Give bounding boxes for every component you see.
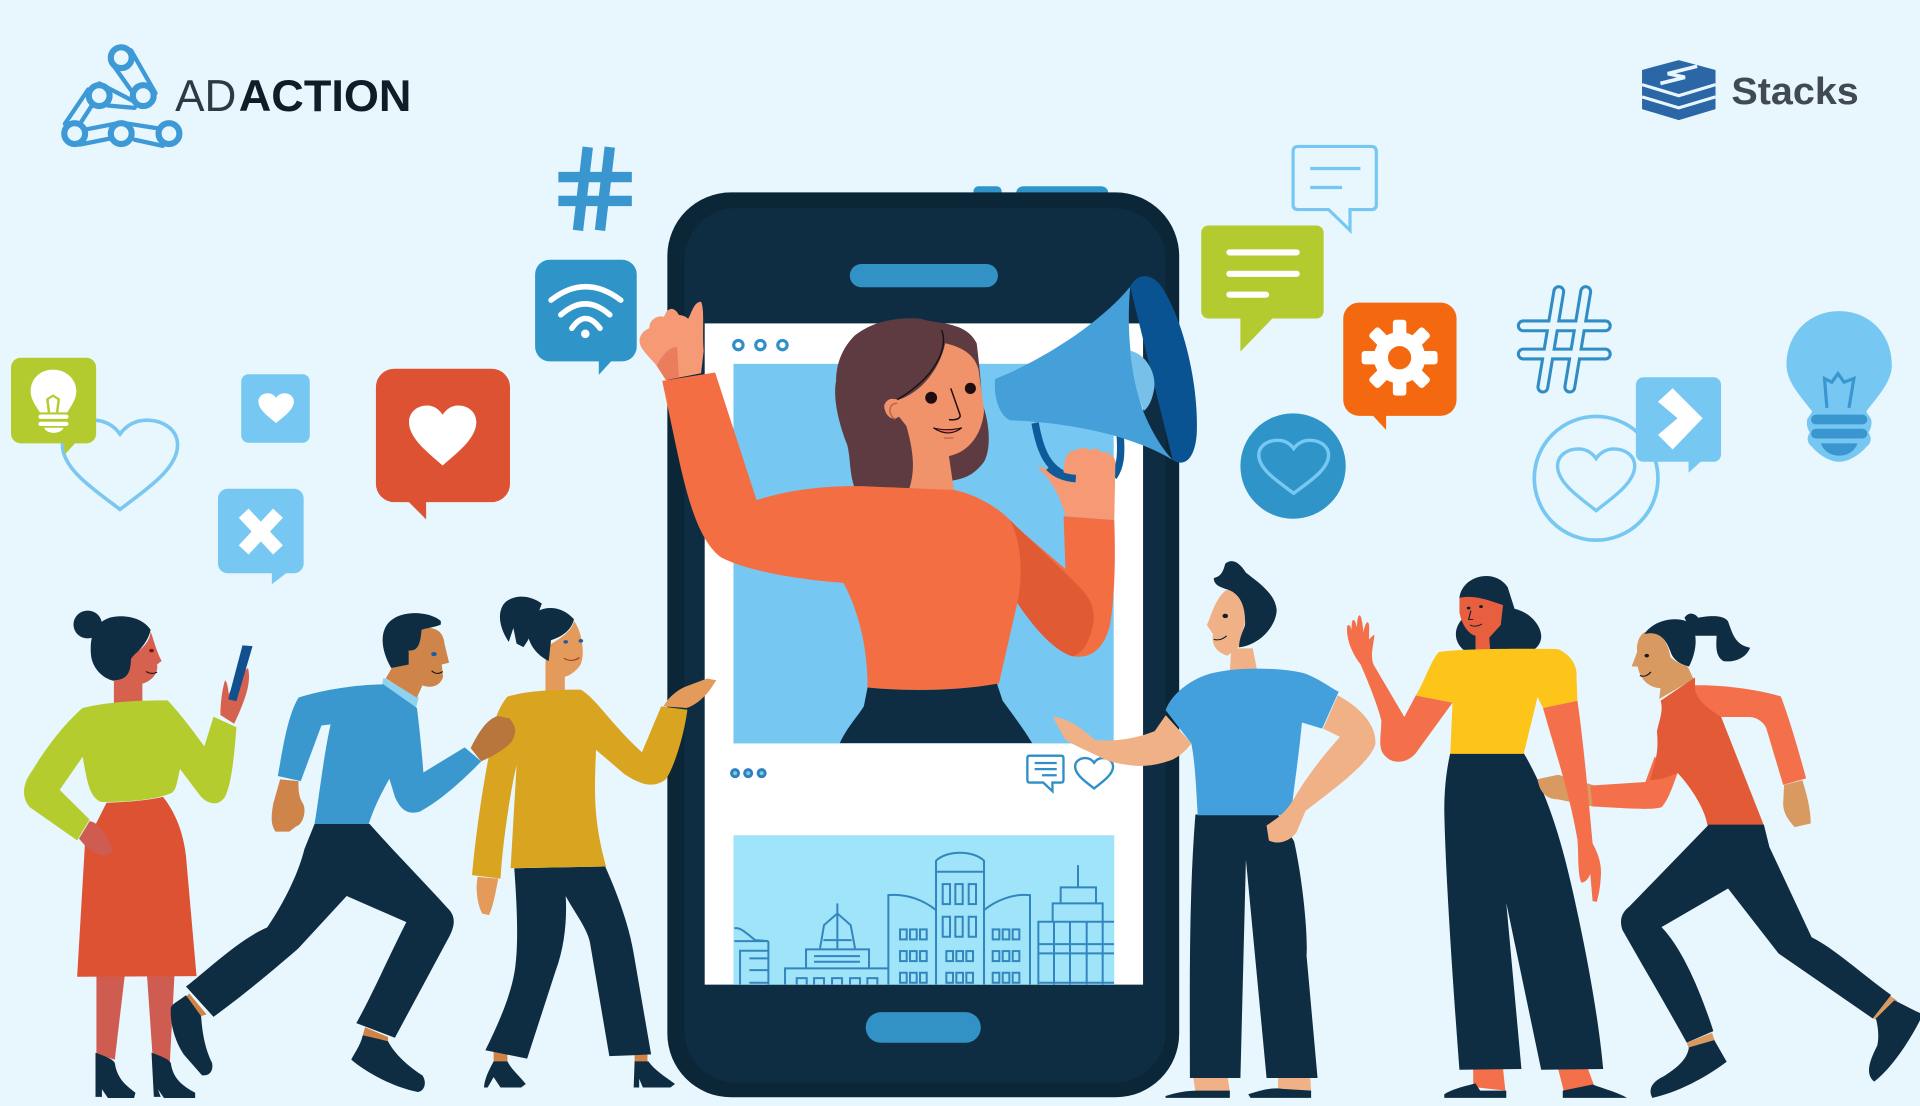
ankles — [494, 1051, 647, 1063]
yellow top — [1416, 649, 1577, 754]
neck and face — [546, 621, 583, 692]
hair back — [1456, 576, 1541, 653]
blue sweater — [278, 684, 481, 824]
figure: woman in yellow top — [1347, 576, 1627, 1098]
ponytail — [1684, 614, 1750, 661]
icon: chevron bubble — [1636, 377, 1721, 473]
icon: lightbulb bubble green — [11, 358, 96, 454]
like heart icon — [1075, 758, 1113, 788]
back hand — [1538, 775, 1595, 807]
torso — [1650, 677, 1764, 825]
shoes — [1166, 1088, 1311, 1098]
logo wordmark: AD — [175, 72, 236, 121]
face — [1207, 590, 1246, 656]
figure: woman in mustard sweater — [472, 597, 716, 1088]
face — [1459, 597, 1503, 650]
megaphone handle — [1035, 423, 1121, 479]
arm on hip — [1267, 695, 1375, 843]
phone: background bars behind device — [973, 186, 1108, 199]
hair — [91, 616, 151, 681]
figure: woman with bun and phone — [24, 611, 253, 1098]
man's hand on shoulder — [471, 716, 515, 761]
icon: outline hashtag — [1523, 292, 1605, 387]
shoes — [1444, 1083, 1627, 1098]
icon: AdAction network mark — [64, 47, 179, 146]
hair — [383, 613, 441, 668]
head — [386, 628, 449, 698]
figures: left group — [24, 597, 716, 1098]
skirt — [840, 684, 1032, 743]
face and neck — [884, 343, 984, 494]
phone body — [667, 192, 1179, 1097]
trousers — [186, 824, 454, 1038]
lower post dots — [732, 770, 765, 777]
megaphone — [995, 276, 1197, 463]
screen — [705, 323, 1143, 985]
shoes — [171, 995, 425, 1092]
logo wordmark: ACTION — [239, 72, 411, 121]
bun — [73, 611, 102, 638]
icon: solid hashtag — [558, 147, 632, 230]
face — [1632, 631, 1694, 699]
ankles — [1193, 1076, 1311, 1092]
trousers — [1621, 825, 1891, 1043]
handle over thumb — [1049, 467, 1076, 479]
pointing arm of man in t-shirt — [1053, 715, 1191, 766]
figure: man in blue t-shirt — [1166, 561, 1375, 1098]
hands — [477, 678, 716, 915]
icon: orange gear bubble — [1343, 303, 1457, 430]
hair — [527, 608, 574, 661]
figure: running man in blue — [171, 613, 481, 1092]
icon: light blue lightbulb — [1787, 311, 1892, 462]
hand on hip — [79, 821, 112, 855]
yellow-top woman's lowered arm — [1543, 701, 1601, 902]
speaker — [850, 264, 998, 287]
hair — [1644, 619, 1696, 666]
icon: heart in ring — [1534, 416, 1658, 540]
post image panel — [733, 364, 1114, 743]
figure: woman with megaphone — [640, 276, 1197, 743]
icon: X bubble — [218, 489, 304, 584]
green sweater — [24, 700, 236, 840]
mustard sweater — [472, 690, 687, 879]
trousers — [1190, 814, 1318, 1078]
hair — [835, 318, 989, 488]
comment icon — [1027, 756, 1063, 791]
home button — [866, 1012, 981, 1043]
orange sweater — [662, 373, 1115, 690]
sleeve shade — [1010, 520, 1094, 656]
logo: AdAction — [64, 47, 411, 146]
icon: outline heart left — [62, 420, 178, 509]
facial features — [890, 330, 976, 438]
city panel — [733, 835, 1114, 985]
trousers — [1444, 753, 1603, 1070]
icon: red heart bubble — [376, 369, 510, 519]
figure: running woman — [1538, 614, 1920, 1098]
gear — [1362, 320, 1438, 396]
boots — [96, 1053, 195, 1098]
skirt — [77, 797, 197, 977]
top post dots — [734, 340, 787, 350]
wordmark: Stacks — [1731, 71, 1859, 113]
back arm — [1590, 757, 1678, 809]
logo: Stacks — [1642, 60, 1859, 120]
icon: outline chat bubble — [1293, 146, 1376, 230]
icon: wifi bubble — [535, 260, 637, 375]
thumbs up hand — [640, 302, 704, 380]
trousers — [485, 866, 651, 1059]
icon: Stacks layers — [1642, 60, 1716, 120]
ankles — [186, 994, 388, 1042]
shoes — [1651, 1000, 1920, 1098]
hand — [220, 668, 249, 724]
neck — [1230, 648, 1257, 672]
front arm — [1695, 685, 1806, 785]
city skyline — [734, 853, 1114, 987]
icon: small heart square — [241, 374, 310, 443]
phone — [667, 192, 1179, 1097]
figures: right group — [1166, 561, 1920, 1098]
ankles — [1687, 995, 1897, 1049]
collar — [382, 678, 419, 709]
face — [114, 631, 162, 703]
front hand — [1783, 780, 1811, 827]
icon: blue heart circle — [1240, 413, 1346, 519]
ponytail — [500, 597, 542, 647]
left hand — [272, 779, 305, 832]
heels — [484, 1061, 675, 1088]
legs — [96, 974, 174, 1061]
ankles — [1473, 1069, 1594, 1091]
hair — [1214, 561, 1277, 647]
phone — [228, 645, 253, 701]
icon: green chat bubble — [1201, 225, 1324, 352]
t-shirt — [1166, 669, 1339, 815]
raised arm — [1347, 615, 1453, 762]
hand gripping megaphone — [1038, 448, 1115, 520]
